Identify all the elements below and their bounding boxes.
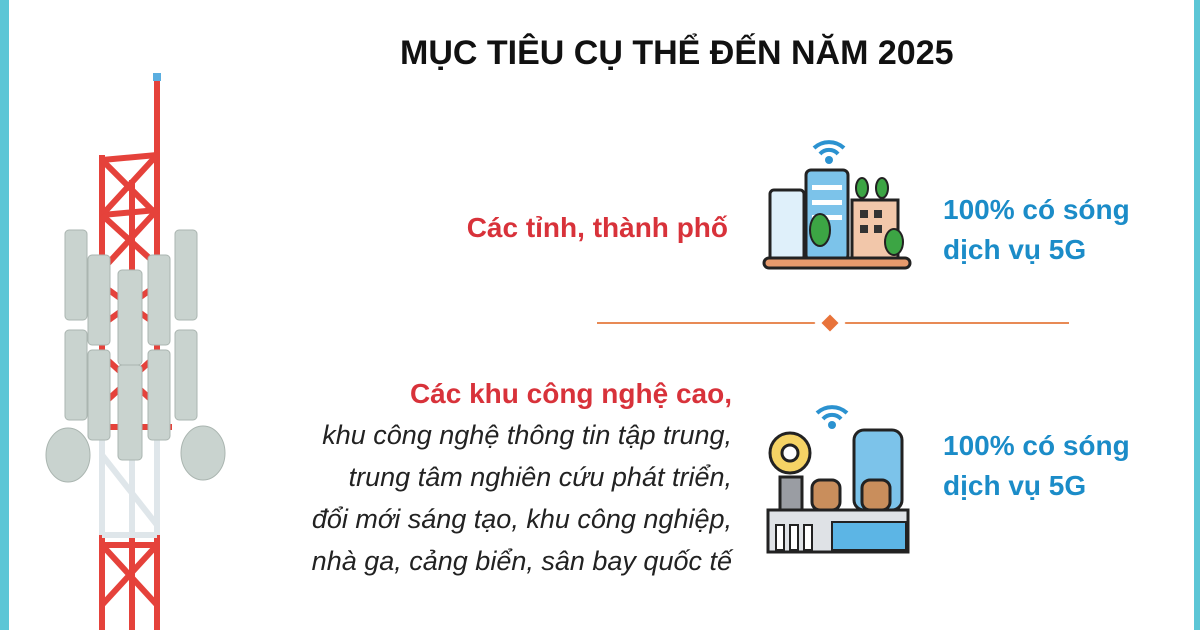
stat: zones 5G xyxy=(943,430,1130,501)
left teal strip xyxy=(0,0,9,630)
stat: provinces 5G: dịch vụ 5G xyxy=(943,234,1086,265)
text block: high-tech zones: Các khu công nghệ cao, xyxy=(410,378,732,409)
text block: high-tech zones: khu công nghệ thông tin tập trung, xyxy=(322,420,732,450)
stat: provinces 5G: 100% có sóng xyxy=(943,194,1130,225)
text block: high-tech zones: trung tâm nghiên cứu phát triển, xyxy=(349,462,732,492)
right teal strip xyxy=(1194,0,1200,630)
tower illustration xyxy=(46,73,226,630)
stat: zones 5G: dịch vụ 5G xyxy=(943,470,1086,501)
label: provinces: Các tỉnh, thành phố xyxy=(467,212,728,243)
text block: high-tech zones xyxy=(312,378,734,576)
icon: city with wifi xyxy=(762,140,912,270)
stat: zones 5G: 100% có sóng xyxy=(943,430,1130,461)
divider with diamond xyxy=(597,314,1069,332)
stat: provinces 5G xyxy=(943,194,1130,265)
title: MỤC TIÊU CỤ THỂ ĐẾN NĂM 2025 xyxy=(400,34,954,72)
text block: high-tech zones: nhà ga, cảng biển, sân bay quốc tế xyxy=(312,546,732,576)
icon: factory with wifi xyxy=(766,405,910,554)
text block: high-tech zones: đổi mới sáng tạo, khu công nghiệp, xyxy=(312,504,732,534)
